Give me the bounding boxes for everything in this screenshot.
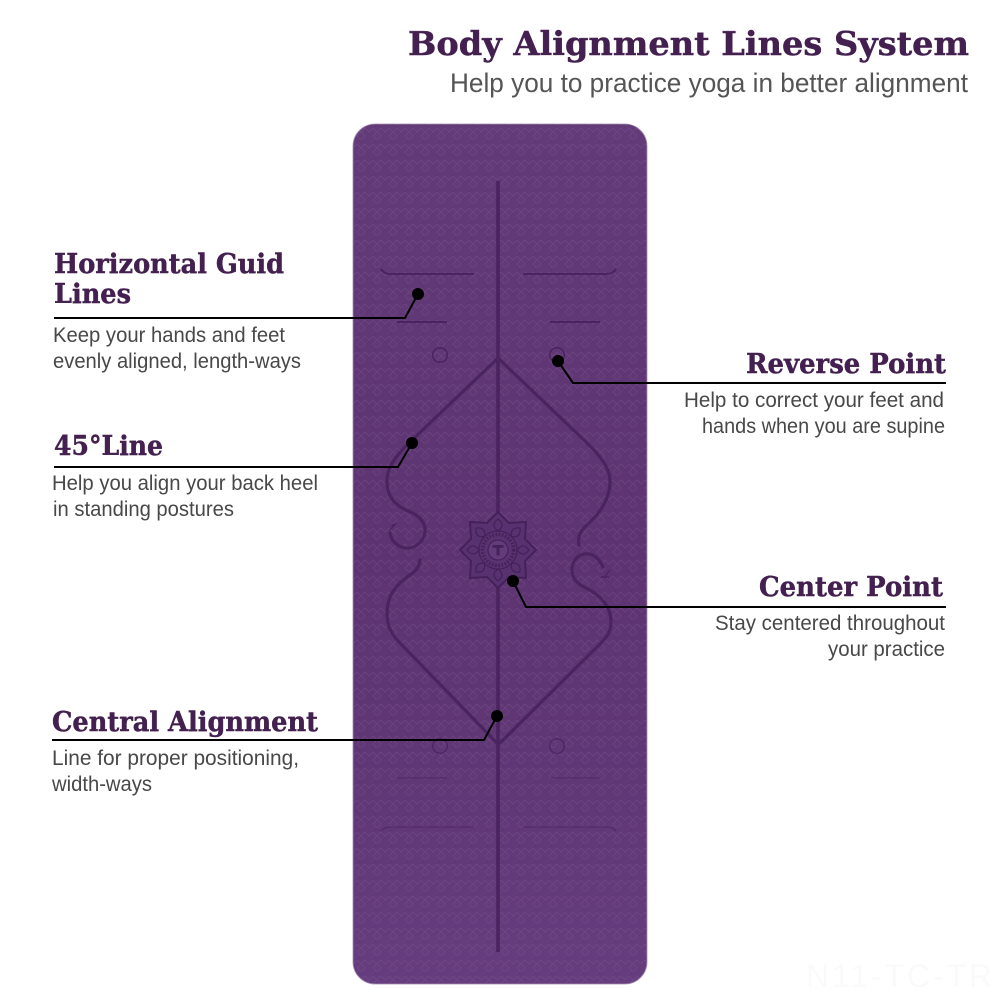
- subtitle: Help you to practice yoga in better alignment: [450, 68, 969, 98]
- 45 degree diamond lines: [387, 358, 611, 743]
- marker dot: [552, 355, 564, 367]
- callout heading: Reverse Point: [746, 349, 947, 380]
- callout heading: Horizontal Guid: [54, 249, 284, 280]
- callout description second line: your practice: [828, 638, 945, 661]
- yoga mat: [353, 124, 647, 984]
- callout: horizontal guide lines: [53, 249, 424, 373]
- mandala center logo: [460, 512, 536, 588]
- lower horizontal guide lines: [381, 778, 616, 831]
- leader line: [52, 716, 497, 740]
- marker dot: [412, 288, 424, 300]
- central alignment line: [496, 181, 500, 952]
- callout description second line: hands when you are supine: [702, 415, 945, 438]
- lower reverse point circles: [433, 739, 564, 753]
- callout description second line: in standing postures: [53, 498, 234, 521]
- leader line: [54, 443, 412, 467]
- mat body: [353, 124, 647, 984]
- callout heading: Center Point: [759, 572, 943, 603]
- callout heading second line: Lines: [54, 279, 131, 310]
- watermark: N11-TC-TR: [806, 958, 992, 994]
- marker dot: [491, 710, 503, 722]
- callout description: Keep your hands and feet: [53, 324, 285, 347]
- marker dot: [406, 437, 418, 449]
- upper reverse point circles: [433, 348, 564, 362]
- leader line: [54, 294, 418, 318]
- leader line: [558, 361, 946, 383]
- leader line: [513, 581, 946, 607]
- upper horizontal guide lines: [381, 269, 616, 322]
- callout description: Help to correct your feet and: [684, 389, 944, 412]
- title: Body Alignment Lines System: [408, 24, 969, 63]
- callout: center point: [507, 572, 946, 661]
- callout description second line: width-ways: [51, 773, 152, 796]
- mat texture: [353, 124, 647, 984]
- callout description: Stay centered throughout: [715, 612, 945, 635]
- callout heading: Central Alignment: [52, 707, 319, 738]
- marker dot: [507, 575, 519, 587]
- small side marks: [390, 523, 610, 578]
- callout: 45 degree line: [52, 431, 418, 521]
- callout heading: 45°Line: [54, 431, 163, 462]
- callout description second line: evenly aligned, length-ways: [53, 350, 301, 373]
- callout: central alignment: [51, 707, 503, 796]
- callout description: Help you align your back heel: [52, 472, 318, 495]
- callout: reverse point: [552, 349, 947, 438]
- callout description: Line for proper positioning,: [52, 747, 299, 770]
